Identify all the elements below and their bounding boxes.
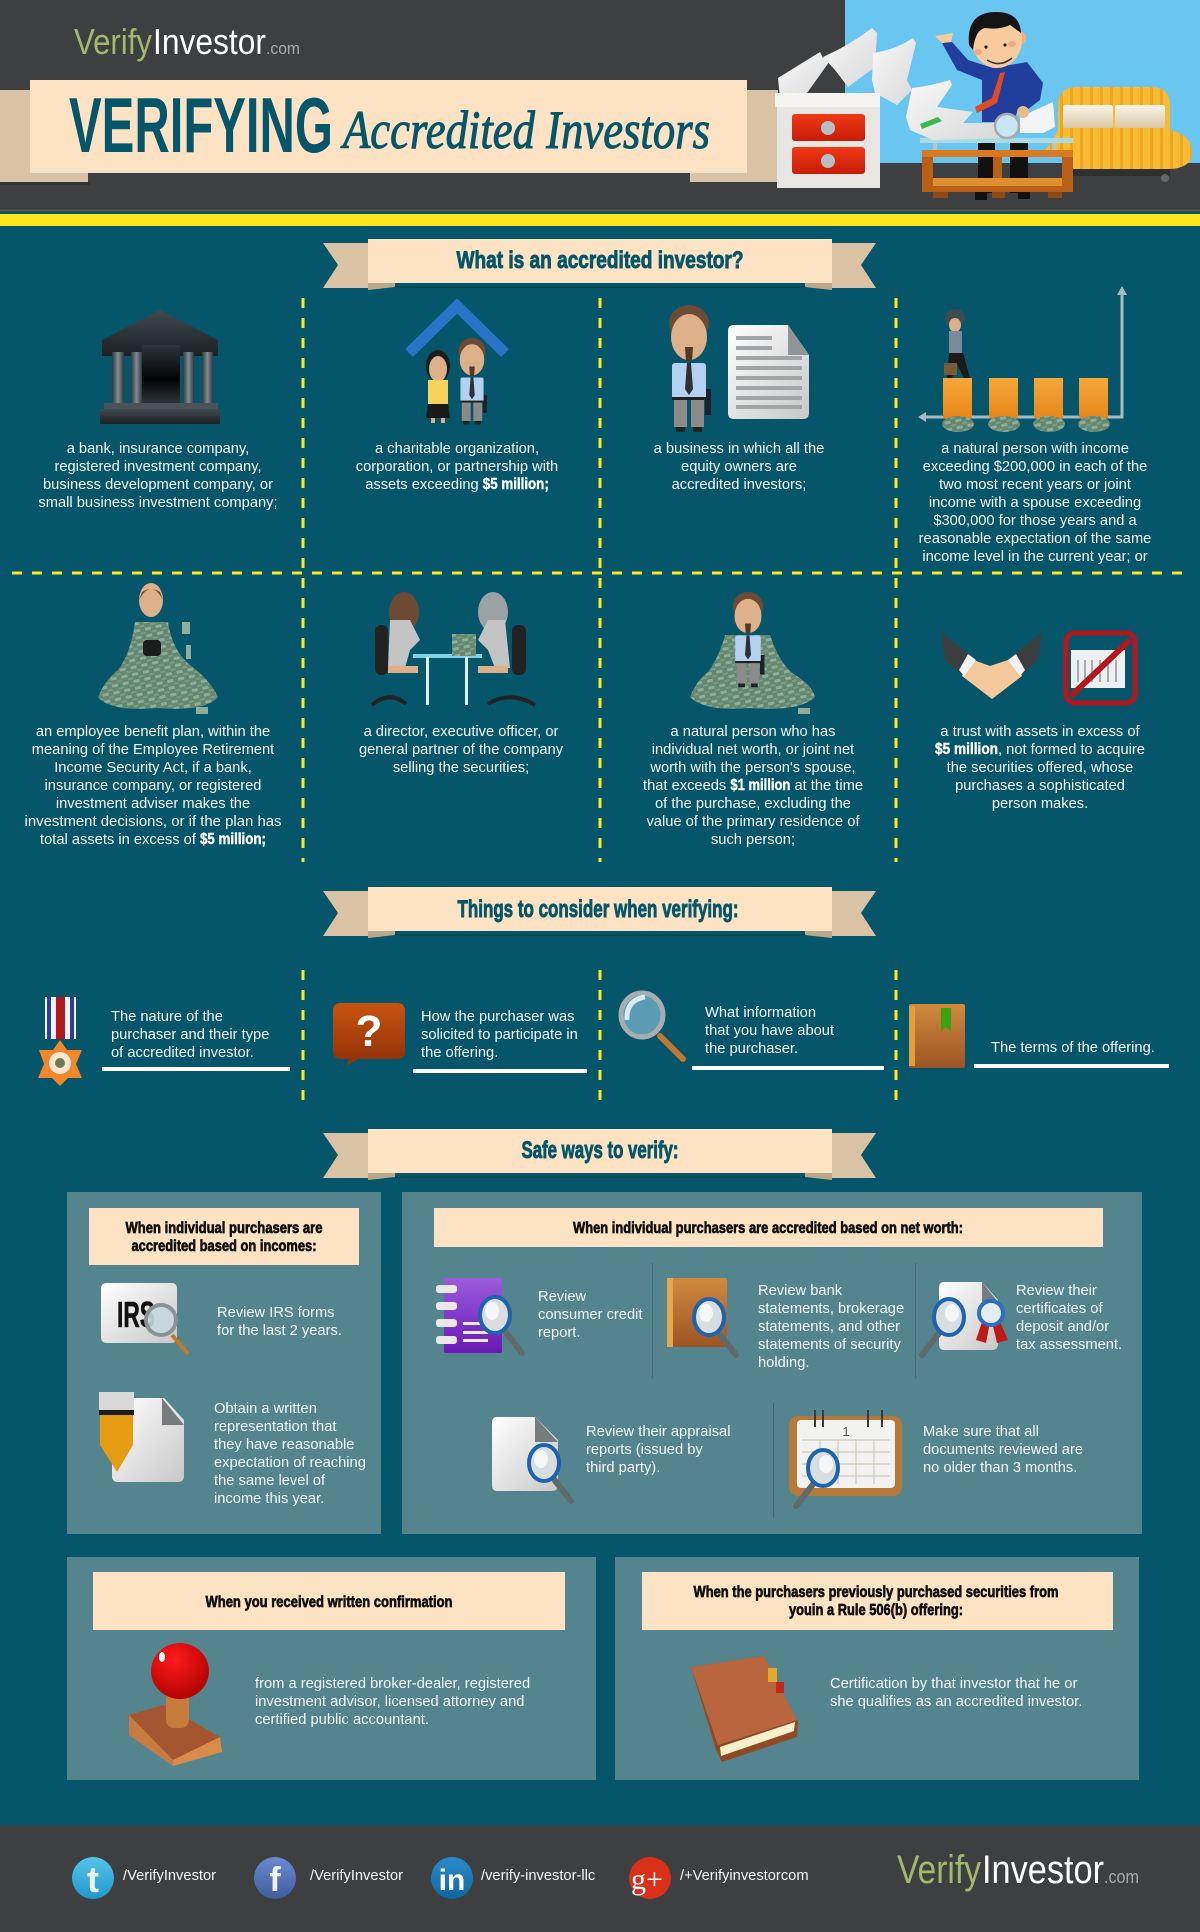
header: written confirmation: When you received written confirmation: [206, 1594, 452, 1611]
section banner: safe ways to verify: Safe ways to verify:: [522, 1137, 678, 1164]
text: what information: What information: [705, 1005, 816, 1021]
text: natural person income: reasonable expectation of the same: [919, 531, 1151, 547]
icon: linkedin: in: [439, 1864, 465, 1897]
logo: Investor: [982, 1848, 1104, 1892]
icon: man on money pile: [690, 592, 815, 714]
header: previous purchase: [642, 1572, 1113, 1630]
text: appraisal: reports (issued by: [586, 1442, 703, 1458]
icon: pen and document: [99, 1392, 184, 1482]
text: employee benefit plan: investment adviser makes the: [56, 796, 250, 812]
text: terms: [974, 1040, 1169, 1068]
icon: twitter: [72, 1857, 114, 1900]
text: natural person net worth: individual net worth, or joint net: [652, 742, 854, 758]
text: natural person net worth: worth with the person's spouse,: [649, 760, 856, 776]
item: question speech bubble: ?: [356, 1007, 382, 1056]
text: what information: the purchaser.: [705, 1041, 798, 1057]
handle: twitter: /VerifyInvestor: [123, 1868, 216, 1884]
icon: calendar: 1: [842, 1424, 850, 1439]
logo: Verify: [74, 21, 152, 62]
text: natural person income: income level in the current year; or: [922, 549, 1148, 565]
text: director: selling the securities;: [393, 760, 529, 776]
text: certificates: Review their: [1016, 1283, 1097, 1299]
text: obtain representation: they have reasonable: [214, 1437, 354, 1453]
panel: based on net worth: [402, 1192, 1142, 1534]
icon: facebook: f: [269, 1861, 281, 1899]
text: consumer credit: Review: [538, 1289, 587, 1305]
icon: no shopping basket: [1066, 633, 1135, 703]
dashed grid: [12, 298, 1190, 1100]
text: obtain representation: Obtain a written: [214, 1401, 317, 1417]
icon: google plus: g+: [631, 1863, 663, 1896]
icon: certificate with ribbon: [922, 1282, 1008, 1355]
text: natural person income: $300,000 for those years and a: [933, 513, 1137, 529]
text: broker-dealer: certified public accountant.: [255, 1712, 429, 1728]
text: broker-dealer: from a registered broker-dealer, registered: [255, 1676, 530, 1692]
handle: google plus: /+Verifyinvestorcom: [680, 1868, 809, 1884]
icon: appraisal document: [492, 1417, 571, 1501]
divider: [652, 1263, 653, 1378]
text: review IRS: [217, 1305, 342, 1339]
icon: book with magnifier: [667, 1278, 736, 1355]
text: trust: person makes.: [992, 796, 1088, 812]
text: employee benefit plan: an employee benefit plan, within the: [36, 724, 270, 740]
header: incomes: [89, 1208, 359, 1265]
text: bank statements: [758, 1283, 904, 1371]
text: employee benefit plan: meaning of the Employee Retirement: [32, 742, 274, 758]
text: consumer credit: consumer credit: [538, 1307, 642, 1323]
text: obtain representation: representation that: [214, 1419, 336, 1435]
text: business: [654, 441, 824, 493]
logo: Investor: [153, 21, 266, 62]
title banner: Accredited Investors: [341, 100, 710, 160]
icon: twitter: t: [87, 1859, 99, 1900]
text: how solicited: [413, 1009, 587, 1073]
icon: IRS form: [101, 1283, 188, 1354]
text: three months: Make sure that all: [923, 1424, 1039, 1440]
panel: written confirmation: [67, 1557, 596, 1780]
logo: .com: [266, 39, 300, 58]
header: incomes: When individual purchasers are: [126, 1220, 323, 1237]
header: net worth: [434, 1208, 1103, 1247]
text: obtain representation: the same level of: [214, 1473, 326, 1489]
text: certificates: tax assessment.: [1016, 1337, 1122, 1353]
section banner: things to consider: Things to consider when verifying:: [458, 896, 738, 923]
text: natural person income: [919, 441, 1151, 565]
title banner: VERIFYING: [69, 81, 333, 169]
item: question speech bubble: [333, 1003, 405, 1066]
section banner: what is an accredited investor: [323, 239, 876, 290]
text: charitable: a charitable organization,: [375, 441, 539, 457]
icon: bank building: [100, 310, 220, 424]
text: trust: [935, 724, 1145, 812]
text: trust: $5 million, not formed to acquire: [935, 741, 1145, 758]
icon: google plus: [629, 1857, 671, 1899]
text: certification: [830, 1676, 1082, 1710]
text: bank statements: statements of security: [758, 1337, 902, 1353]
text: natural person income: exceeding $200,000 in each of the: [923, 459, 1147, 475]
text: natural person net worth: of the purchase, excluding the: [655, 796, 851, 812]
text: certificates: certificates of: [1016, 1301, 1103, 1317]
item: book with bookmark: [909, 1004, 965, 1068]
text: charitable: assets exceeding $5 million;: [365, 476, 549, 493]
icon: woman on money pile: [98, 583, 218, 714]
illustration: drawer cabinet: [775, 93, 880, 188]
text: broker-dealer: investment advisor, licensed attorney and: [255, 1694, 524, 1710]
header: previous purchase: When the purchasers previously purchased securities from: [694, 1584, 1058, 1601]
text: obtain representation: expectation of reaching: [214, 1455, 366, 1471]
text: appraisal: [586, 1424, 730, 1476]
text: bank: small business investment company;: [38, 495, 278, 511]
text: director: a director, executive officer, or: [364, 724, 559, 740]
text: certification: Certification by that investor that he or: [830, 1676, 1077, 1692]
text: director: general partner of the company: [359, 742, 564, 758]
text: how solicited: solicited to participate in: [421, 1027, 578, 1043]
icon: calendar: [789, 1410, 902, 1506]
icon: couple under roof: [409, 306, 505, 424]
text: natural person income: a natural person with income: [941, 441, 1129, 457]
header: incomes: accredited based on incomes:: [132, 1238, 316, 1255]
text: bank statements: holding.: [758, 1355, 809, 1371]
text: natural person net worth: that exceeds $1 million at the time: [643, 777, 863, 794]
illustration: sofa: [1040, 87, 1192, 182]
logo: [74, 21, 300, 62]
text: bank statements: Review bank: [758, 1283, 843, 1299]
text: certification: she qualifies as an accredited investor.: [830, 1694, 1082, 1710]
text: how solicited: How the purchaser was: [421, 1009, 574, 1025]
text: nature of purchaser: purchaser and their type: [111, 1027, 269, 1043]
text: business: a business in which all the: [654, 441, 824, 457]
text: how solicited: the offering.: [421, 1045, 498, 1061]
illustration: flying papers: [778, 28, 1019, 140]
section banner: safe ways to verify: [323, 1129, 876, 1180]
text: trust: a trust with assets in excess of: [940, 724, 1141, 740]
text: terms: The terms of the offering.: [991, 1040, 1155, 1056]
text: natural person net worth: such person;: [711, 832, 795, 848]
text: natural person income: two most recent years or joint: [939, 477, 1131, 493]
text: obtain representation: [214, 1401, 366, 1507]
text: broker-dealer: [255, 1676, 530, 1728]
icon: handshake: [941, 632, 1042, 699]
logo: [897, 1848, 1139, 1892]
text: nature of purchaser: of accredited investor.: [111, 1045, 254, 1061]
text: natural person net worth: value of the primary residence of: [646, 814, 860, 830]
text: three months: [923, 1424, 1083, 1476]
text: natural person income: income with a spouse exceeding: [929, 495, 1141, 511]
panel: based on incomes: [67, 1192, 381, 1534]
text: appraisal: third party).: [586, 1460, 660, 1476]
text: consumer credit: report.: [538, 1325, 580, 1341]
text: bank statements: statements, brokerage: [758, 1301, 904, 1317]
text: obtain representation: income this year.: [214, 1491, 324, 1507]
text: nature of purchaser: [102, 1009, 290, 1071]
section banner: things to consider: [323, 887, 876, 938]
text: three months: no older than 3 months.: [923, 1460, 1077, 1476]
text: employee benefit plan: insurance company, or registered: [45, 778, 261, 794]
text: review IRS: Review IRS forms: [217, 1305, 335, 1321]
text: director: [359, 724, 564, 776]
logo: .com: [1104, 1867, 1139, 1887]
handle: facebook: /VerifyInvestor: [310, 1868, 403, 1884]
text: employee benefit plan: [24, 724, 282, 848]
text: natural person net worth: a natural person who has: [671, 724, 835, 740]
text: consumer credit: [538, 1289, 642, 1341]
text: review IRS: for the last 2 years.: [217, 1323, 342, 1339]
text: charitable: [356, 441, 558, 493]
text: certificates: deposit and/or: [1016, 1319, 1109, 1335]
icon: two executives at desk: [372, 592, 535, 705]
text: trust: purchases a sophisticated: [955, 778, 1125, 794]
text: business: equity owners are: [681, 459, 797, 475]
divider: [915, 1263, 916, 1378]
logo: Verify: [897, 1848, 981, 1892]
divider: [773, 1403, 774, 1518]
text: employee benefit plan: investment decisions, or if the plan has: [24, 814, 282, 830]
handle: linkedin: /verify-investor-llc: [481, 1868, 595, 1884]
text: bank: business development company, or: [43, 477, 273, 493]
text: trust: the securities offered, whose: [947, 760, 1133, 776]
title banner: [0, 80, 778, 185]
text: what information: [692, 1005, 884, 1070]
text: what information: that you have about: [705, 1023, 834, 1039]
item: medal: [38, 997, 82, 1086]
header: previous purchase: youin a Rule 506(b) offering:: [789, 1602, 963, 1619]
icon: IRS form: IRS: [117, 1294, 155, 1335]
text: bank statements: statements, and other: [758, 1319, 900, 1335]
icon: brown book: [691, 1656, 798, 1762]
header: net worth: When individual purchasers are accredited based on net worth:: [573, 1220, 963, 1237]
icon: rubber stamp: [129, 1643, 222, 1766]
icon: linkedin: [431, 1857, 473, 1899]
text: bank: [38, 441, 278, 511]
icon: purple notebook: [436, 1278, 522, 1353]
panel: previous purchase: [615, 1557, 1139, 1780]
item: magnifying glass: [621, 993, 683, 1059]
text: employee benefit plan: total assets in excess of $5 million;: [40, 831, 266, 848]
text: business: accredited investors;: [672, 477, 806, 493]
text: bank: registered investment company,: [54, 459, 262, 475]
header: written confirmation: [93, 1572, 565, 1630]
text: appraisal: Review their appraisal: [586, 1424, 730, 1440]
text: natural person net worth: [643, 724, 863, 848]
section banner: what is an accredited investor: What is an accredited investor?: [456, 247, 744, 274]
text: three months: documents reviewed are: [923, 1442, 1083, 1458]
footer: [0, 1825, 1200, 1932]
text: bank: a bank, insurance company,: [67, 441, 249, 457]
icon: facebook: [254, 1857, 296, 1899]
icon: income steps chart: [918, 286, 1127, 432]
header: [0, 0, 1200, 226]
text: charitable: corporation, or partnership with: [356, 459, 558, 475]
illustration: man at table: [920, 12, 1073, 200]
text: nature of purchaser: The nature of the: [111, 1009, 223, 1025]
text: certificates: [1016, 1283, 1122, 1353]
icon: businessman and document: [669, 305, 809, 432]
text: employee benefit plan: Income Security Act, if a bank,: [54, 760, 252, 776]
